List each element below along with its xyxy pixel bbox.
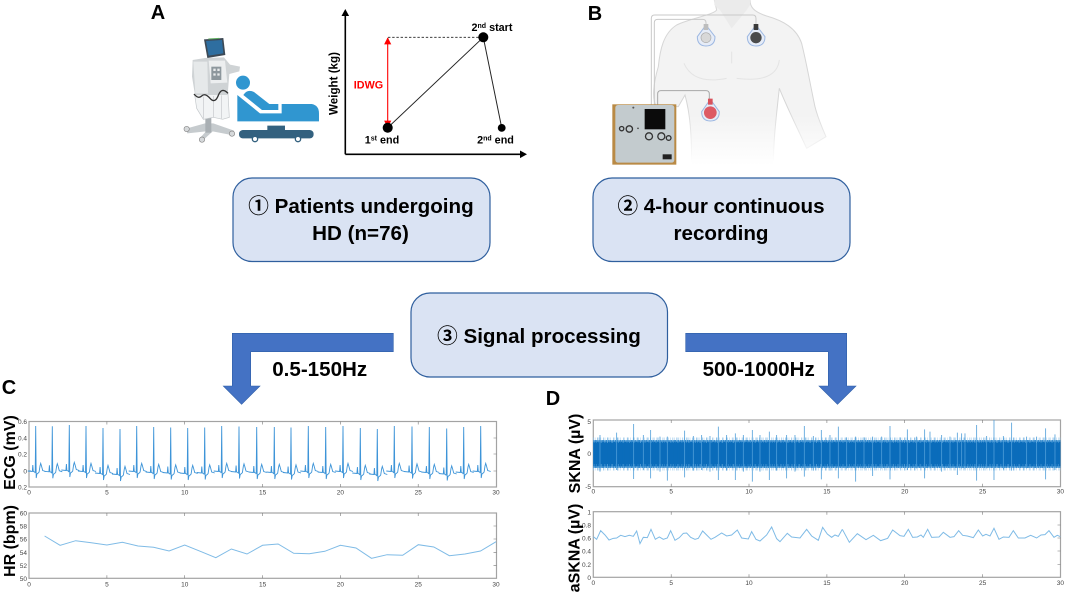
aSKNA x tick labels: 10 bbox=[745, 580, 753, 587]
y axis label: SKNA: SKNA (µV) bbox=[567, 414, 584, 493]
IDWG arrow bbox=[387, 38, 389, 127]
y axis label: HR: HR (bpm) bbox=[2, 505, 19, 577]
aSKNA x tick labels: 30 bbox=[1057, 580, 1064, 587]
aSKNA y tick labels: 1 bbox=[587, 510, 591, 516]
HR x tick labels: 0 bbox=[27, 582, 31, 588]
aSKNA x tick labels: 5 bbox=[669, 580, 673, 587]
ECG ticks bbox=[107, 422, 497, 487]
aSKNA y tick labels: 0 bbox=[587, 575, 591, 582]
ECG trace bbox=[28, 425, 491, 481]
ECG x tick labels: 25 bbox=[415, 490, 422, 496]
ECG y tick labels: 0.2 bbox=[18, 484, 27, 492]
label: 0.5-150Hz: 0.5-150Hz bbox=[272, 358, 367, 381]
electrode: white bbox=[697, 24, 715, 46]
electrode: red bbox=[702, 99, 719, 121]
aSKNA x tick labels bbox=[591, 580, 1064, 587]
step box 1: patients: ① Patients undergoing bbox=[248, 195, 474, 218]
2nd end label: nd bbox=[483, 136, 492, 142]
HR y tick labels: 52 bbox=[20, 563, 27, 570]
arrow: high-frequency branch bbox=[686, 333, 856, 404]
aSKNA y tick labels: 0.2 bbox=[582, 562, 591, 569]
SKNA spikes bbox=[600, 420, 1055, 482]
chart: heart rate bbox=[20, 510, 500, 588]
2nd end label: end bbox=[492, 134, 514, 146]
weight line bbox=[388, 37, 502, 128]
HR ticks bbox=[107, 513, 497, 578]
1st end label: end bbox=[377, 134, 399, 146]
SKNA x tick labels: 10 bbox=[745, 488, 753, 496]
recording device bbox=[612, 104, 676, 165]
aSKNA x tick labels: 0 bbox=[591, 580, 595, 587]
y axis label: ECG: ECG (mV) bbox=[2, 415, 19, 490]
1st end label: 1 bbox=[365, 134, 371, 146]
HR x tick labels: 25 bbox=[415, 582, 422, 588]
ECG x tick labels: 20 bbox=[337, 490, 344, 496]
chart: SKNA bbox=[585, 419, 1064, 496]
HR y tick labels: 58 bbox=[20, 524, 27, 530]
SKNA light fringe base bbox=[593, 440, 1060, 468]
HR trace bbox=[45, 536, 496, 558]
neck and chest shading bbox=[714, 0, 750, 28]
y axis label: aSKNA: aSKNA (µV) bbox=[566, 504, 584, 592]
HR x tick labels: 30 bbox=[492, 582, 500, 588]
label: 500-1000Hz: 500-1000Hz bbox=[703, 358, 815, 381]
SKNA y tick labels: 0 bbox=[587, 451, 591, 458]
step box 2: recording: recording bbox=[674, 222, 768, 245]
SKNA x tick labels: 30 bbox=[1057, 488, 1064, 496]
aSKNA x tick labels: 20 bbox=[901, 580, 909, 587]
torso bbox=[654, 0, 826, 166]
icon: hemodialysis machine bbox=[184, 38, 240, 142]
chart: ECG bbox=[18, 419, 500, 496]
dashed level bbox=[388, 36, 483, 38]
SKNA frame bbox=[593, 420, 1060, 487]
step box 2: recording: ② 4-hour continuous bbox=[617, 195, 825, 218]
aSKNA x tick labels: 15 bbox=[823, 580, 831, 587]
panel label B: B bbox=[588, 3, 602, 25]
aSKNA frame bbox=[593, 512, 1060, 577]
aSKNA ticks bbox=[671, 512, 1060, 577]
ECG x tick labels bbox=[27, 490, 500, 496]
step box 3: signal processing: ③ Signal processing bbox=[437, 325, 641, 348]
aSKNA y tick labels: 0.6 bbox=[582, 536, 591, 542]
arrow: low-frequency branch bbox=[223, 333, 393, 404]
SKNA light noise bbox=[593, 438, 1060, 470]
HR x tick labels bbox=[27, 582, 500, 588]
ECG y tick labels: 0.6 bbox=[18, 419, 27, 426]
ECG frame bbox=[29, 422, 496, 487]
SKNA x tick labels bbox=[591, 488, 1064, 496]
SKNA y tick labels: 5 bbox=[587, 419, 591, 426]
ECG y tick labels: 0.4 bbox=[18, 436, 27, 442]
wires bbox=[651, 15, 756, 105]
aSKNA trace bbox=[593, 527, 1060, 544]
step box 1: patients bbox=[233, 178, 490, 262]
SKNA y tick labels bbox=[585, 419, 591, 491]
ECG y tick labels bbox=[18, 419, 27, 492]
ECG x tick labels: 0 bbox=[27, 490, 31, 496]
aSKNA x tick labels: 25 bbox=[979, 580, 987, 587]
1st end label: st bbox=[371, 136, 378, 142]
axes bbox=[345, 14, 522, 154]
illustration: torso with electrodes bbox=[612, 0, 826, 166]
HR y tick labels: 50 bbox=[20, 576, 27, 583]
SKNA x tick labels: 20 bbox=[901, 488, 909, 496]
SKNA x tick labels: 25 bbox=[979, 488, 987, 496]
SKNA y tick labels: -5 bbox=[585, 484, 591, 491]
HR x tick labels: 15 bbox=[259, 582, 267, 588]
ECG x tick labels: 10 bbox=[181, 490, 189, 496]
2nd start label: start bbox=[486, 22, 513, 34]
SKNA x tick labels: 15 bbox=[823, 488, 831, 496]
SKNA dark jitter bbox=[593, 442, 1060, 466]
HR y tick labels: 54 bbox=[20, 550, 27, 557]
SKNA ticks bbox=[671, 420, 983, 487]
chart: weight over time bbox=[328, 9, 527, 158]
SKNA x tick labels: 0 bbox=[591, 488, 595, 496]
HR y tick labels bbox=[20, 510, 27, 583]
HR x tick labels: 5 bbox=[105, 582, 109, 588]
HR frame bbox=[29, 513, 496, 578]
SKNA dense band bbox=[593, 443, 1060, 464]
2nd end label: 2 bbox=[477, 134, 483, 146]
aSKNA y tick labels bbox=[582, 510, 591, 582]
axis arrowheads bbox=[342, 9, 527, 158]
ECG x tick labels: 5 bbox=[105, 490, 109, 496]
ECG y tick labels: 0 bbox=[23, 468, 27, 476]
icon: patient on bed bbox=[236, 76, 319, 142]
2nd start label: nd bbox=[478, 23, 486, 30]
SKNA x tick labels: 5 bbox=[669, 488, 673, 496]
panel label A: A bbox=[151, 2, 165, 24]
step box 1: patients: HD (n=76) bbox=[312, 222, 409, 245]
HR x tick labels: 20 bbox=[337, 582, 344, 588]
red wire bbox=[658, 91, 709, 105]
step box 3: signal processing bbox=[411, 293, 668, 377]
step box 2: recording bbox=[593, 178, 850, 262]
SKNA mid noise bbox=[593, 440, 1060, 468]
HR y tick labels: 56 bbox=[20, 536, 27, 544]
data points bbox=[383, 32, 506, 133]
ECG x tick labels: 30 bbox=[492, 490, 500, 496]
IDWG label: IDWG bbox=[354, 80, 383, 92]
panel label D: D bbox=[546, 388, 560, 410]
HR x tick labels: 10 bbox=[181, 582, 189, 588]
chart: aSKNA bbox=[582, 510, 1064, 587]
panel label C: C bbox=[2, 377, 16, 399]
electrode: black bbox=[747, 24, 765, 46]
aSKNA y tick labels: 0.4 bbox=[582, 548, 591, 556]
ECG y tick labels: 0.2 bbox=[18, 452, 27, 458]
HR y tick labels: 60 bbox=[20, 510, 27, 518]
y axis label: Weight (kg) bbox=[328, 52, 340, 115]
ECG x tick labels: 15 bbox=[259, 490, 267, 496]
2nd start label: 2 bbox=[472, 22, 478, 34]
aSKNA y tick labels: 0.8 bbox=[582, 522, 591, 530]
